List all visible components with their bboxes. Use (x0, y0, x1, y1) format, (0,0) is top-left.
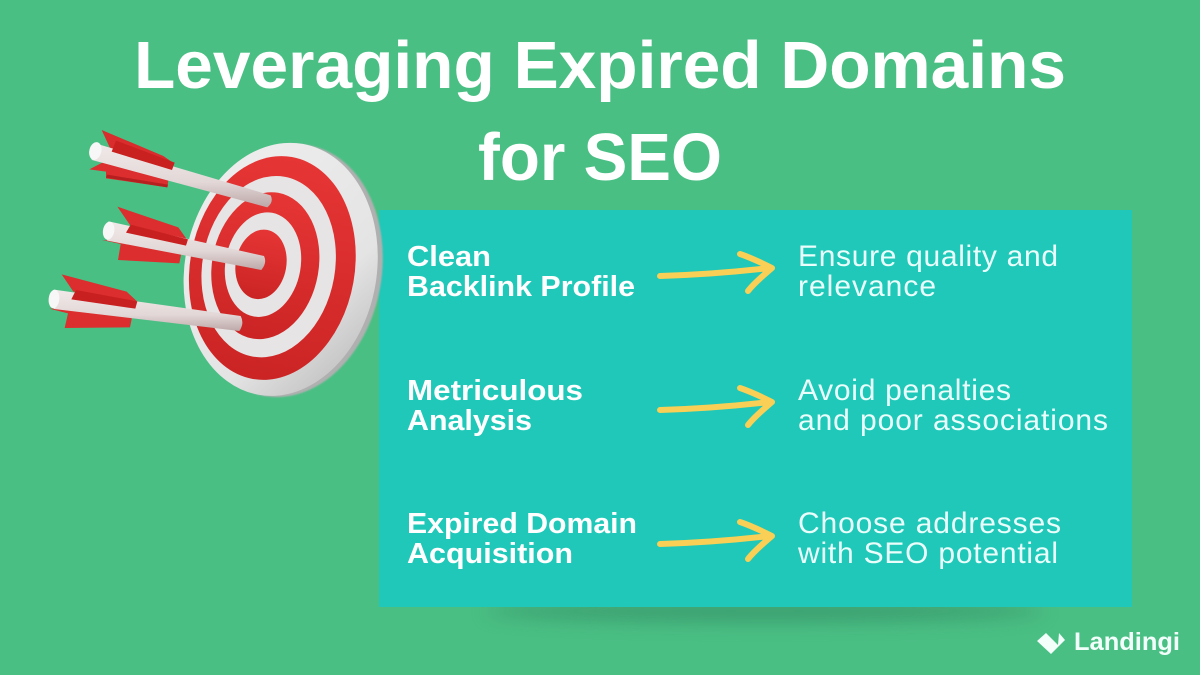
arrow: row 3 (660, 522, 772, 559)
row 1 heading (407, 241, 635, 303)
row 3 heading: Acquisition (407, 538, 573, 570)
row 2 description: Avoid penalties (798, 374, 1011, 407)
row 2 heading (407, 375, 583, 437)
row 3 heading: Expired Domain (407, 508, 637, 540)
arrow: top (87, 130, 272, 207)
row 3 description: with SEO potential (797, 537, 1058, 570)
logo: Landingi (1037, 628, 1180, 656)
arrow: row 2 (660, 388, 772, 425)
row 3 heading (407, 508, 637, 570)
panel shadow (485, 600, 1045, 622)
row 2 heading: Metriculous (407, 375, 583, 407)
arrow: row 1 (660, 254, 772, 291)
title (134, 28, 1066, 195)
row 1 description (798, 240, 1058, 303)
arrow: middle (102, 207, 265, 270)
row 1 heading: Clean (407, 241, 491, 273)
icon: target with three arrows (48, 127, 402, 413)
target board (164, 127, 402, 413)
title: Leveraging Expired Domains (134, 28, 1066, 103)
row 3 description: Choose addresses (798, 507, 1061, 540)
row 1 description: relevance (798, 270, 936, 303)
row 2 heading: Analysis (407, 405, 532, 437)
row 3 description (797, 507, 1061, 570)
row 2 description: and poor associations (798, 404, 1108, 437)
row 2 description (798, 374, 1108, 437)
title: for SEO (478, 120, 722, 195)
panel: teal content panel (379, 210, 1132, 607)
icon: logo mark (1037, 633, 1065, 654)
row 1 description: Ensure quality and (798, 240, 1058, 273)
row 2 (407, 374, 1108, 437)
row 1 heading: Backlink Profile (407, 271, 635, 303)
logo wordmark: Landingi (1074, 628, 1180, 656)
row 3 (407, 507, 1061, 570)
arrow: bottom (48, 274, 242, 331)
row 1 (407, 240, 1058, 303)
